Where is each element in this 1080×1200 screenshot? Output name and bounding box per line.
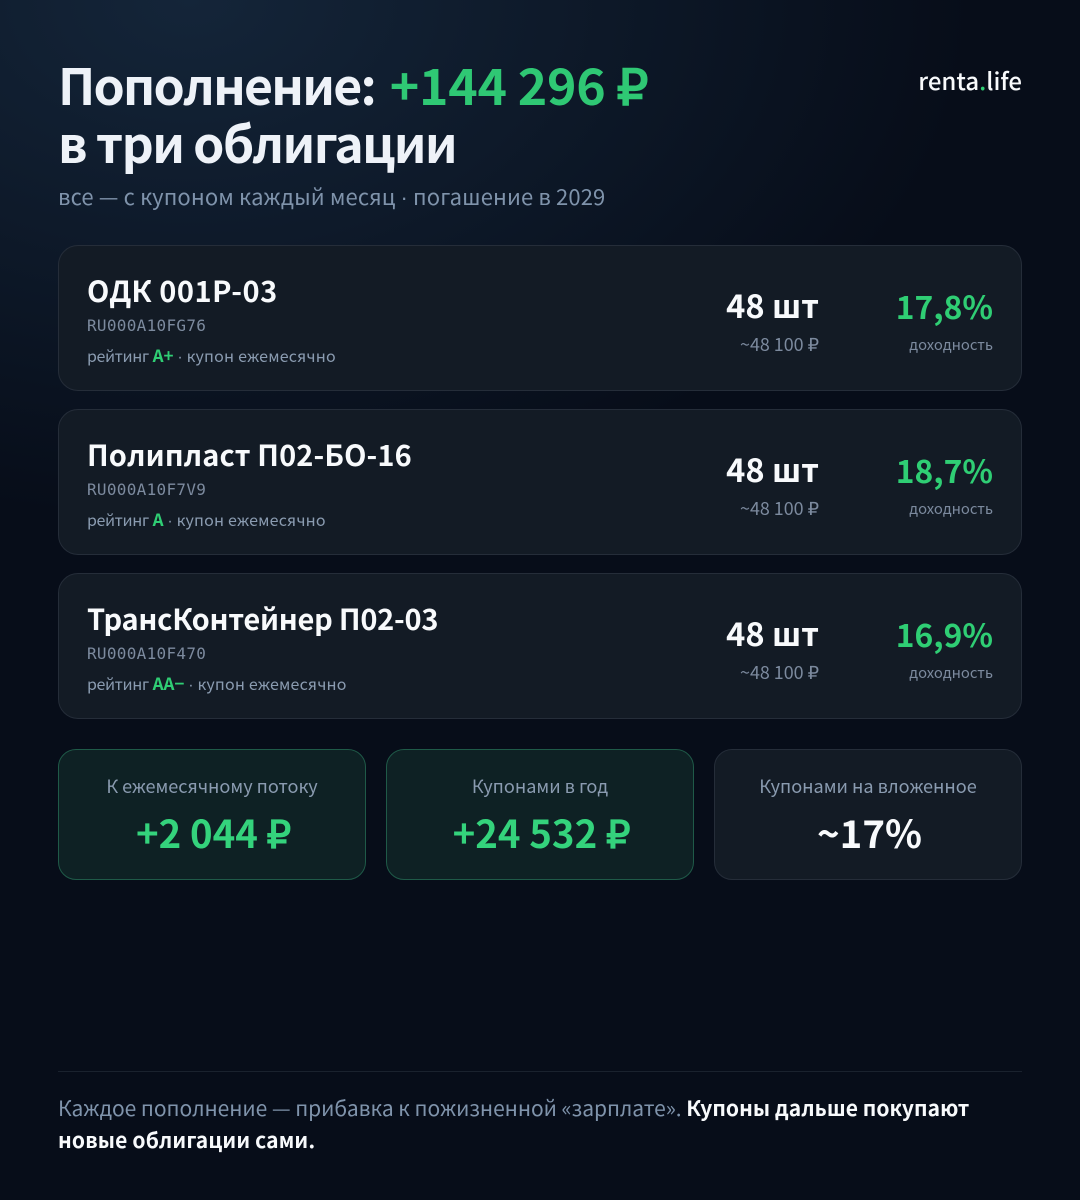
stat label: Купонами на вложенное (759, 773, 977, 799)
stat value: +24 532 ₽ (453, 804, 630, 860)
title: в три облигации (58, 106, 456, 178)
ISIN: RU000A10F470 (87, 644, 206, 663)
title: Пополнение: +144 296 ₽ (58, 48, 648, 120)
amount: ~48 100 ₽ (740, 331, 819, 357)
stat label: Купонами в год (472, 773, 608, 799)
stat label: К ежемесячному потоку (106, 773, 318, 799)
ISIN: RU000A10F7V9 (87, 480, 206, 499)
yield: 16,9% (896, 611, 993, 657)
ISIN: RU000A10FG76 (87, 316, 206, 335)
stat tile: coupons per year (386, 749, 694, 880)
footer note: новые облигации сами. (58, 1125, 315, 1155)
brand logo: renta.life (918, 62, 1022, 97)
rating line: рейтинг AA− · купон ежемесячно (87, 670, 347, 695)
subtitle: все — с купоном каждый месяц · погашение в 2029 (58, 180, 605, 212)
bond name: ТрансКонтейнер П02-03 (87, 597, 438, 639)
yield: 17,8% (896, 283, 993, 329)
bond name: Полипласт П02-БО-16 (87, 433, 412, 475)
footer note (58, 1093, 969, 1155)
panel: bond Полипласт (58, 409, 1022, 555)
amount: ~48 100 ₽ (740, 659, 819, 685)
stat tile: monthly flow (58, 749, 366, 880)
rating line: рейтинг A · купон ежемесячно (87, 506, 326, 531)
stat value: +2 044 ₽ (136, 804, 291, 860)
panel: bond ТрансКонтейнер (58, 573, 1022, 719)
yield label: доходность (909, 498, 993, 519)
amount: ~48 100 ₽ (740, 495, 819, 521)
title (58, 48, 648, 178)
yield: 18,7% (896, 447, 993, 493)
quantity: 48 шт (726, 281, 819, 328)
yield label: доходность (909, 662, 993, 683)
rating line: рейтинг A+ · купон ежемесячно (87, 342, 336, 367)
footer note: Каждое пополнение — прибавка к пожизненной «зарплате». Купоны дальше покупают (58, 1093, 969, 1123)
divider (58, 1071, 1022, 1072)
quantity: 48 шт (726, 609, 819, 656)
stat tile: yield on invested (714, 749, 1022, 880)
bond name: ОДК 001Р-03 (87, 269, 278, 311)
quantity: 48 шт (726, 445, 819, 492)
panel: bond ОДК (58, 245, 1022, 391)
stat value: ~17% (817, 804, 922, 860)
yield label: доходность (909, 334, 993, 355)
